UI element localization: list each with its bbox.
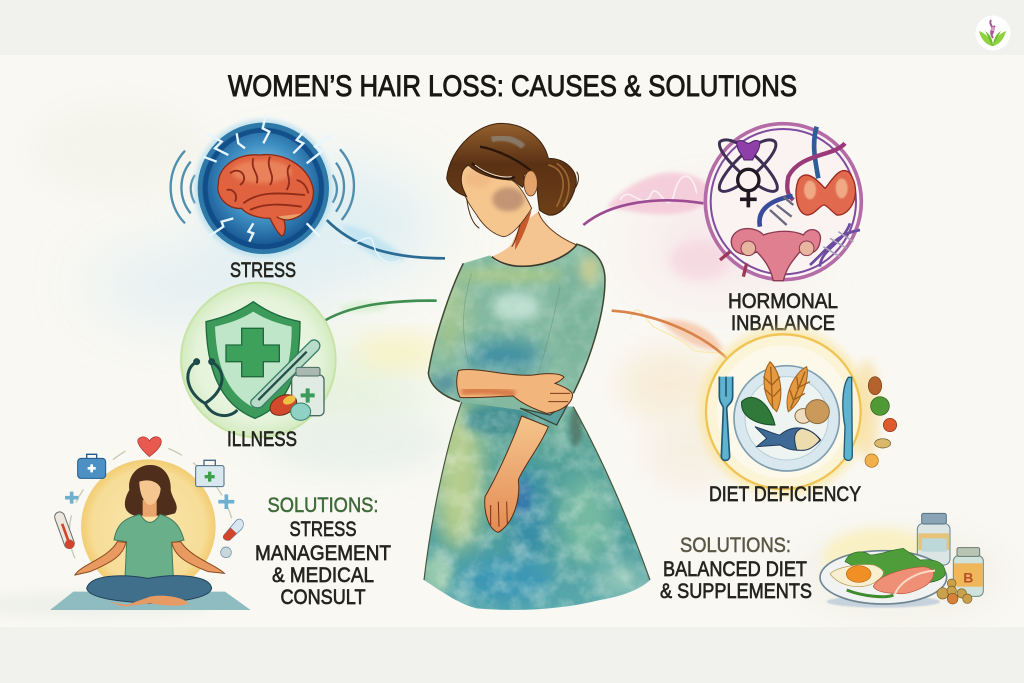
solution: meditation illustration: [50, 437, 251, 610]
solutions label: diet and supplements: & SUPPLEMENTS: [660, 580, 812, 603]
stress label: STRESS: [230, 259, 296, 282]
atom and female symbol: [719, 140, 777, 207]
hormonal circle: [705, 124, 861, 280]
figure neck and chest: [492, 210, 577, 266]
solutions label: stress and medical: SOLUTIONS:: [268, 494, 378, 517]
side nutrients: [865, 377, 897, 467]
meditating woman: [75, 465, 224, 607]
vitamin B bottle: B: [963, 569, 973, 585]
stress lightning bolts: [203, 115, 332, 242]
plate: [734, 366, 839, 471]
solutions label: diet and supplements: [660, 534, 812, 603]
diet connector: [612, 310, 738, 372]
illness circle: [181, 283, 336, 437]
figure hanging arm and hand: [485, 416, 548, 532]
illness stethoscope: [188, 360, 237, 416]
stress brain: [218, 155, 313, 236]
meal glow: [823, 528, 937, 585]
plus signs: [65, 492, 234, 509]
tall supplement bottle: [917, 513, 950, 565]
cause: stress icon: [171, 115, 445, 263]
solution: balanced meal and supplements: [820, 513, 983, 608]
figure hair and bun: [447, 123, 578, 228]
solutions label: stress and medical: CONSULT: [280, 586, 366, 609]
green first aid kit: [196, 460, 224, 487]
solutions label: stress and medical: & MEDICAL: [272, 564, 374, 587]
vitamin B bottle: [953, 548, 983, 596]
uterus: [731, 229, 821, 281]
figure skirt: [423, 402, 650, 610]
solutions label: diet and supplements: BALANCED DIET: [663, 558, 807, 581]
figure faceless head: [461, 165, 532, 237]
figure bodice and sleeves: [427, 243, 607, 427]
fork: [719, 377, 733, 460]
solutions label: stress and medical: STRESS: [290, 518, 356, 541]
knife: [843, 377, 852, 460]
diet deficiency label: DIET DEFICIENCY: [709, 483, 861, 506]
illness medicine bottle: [292, 367, 324, 416]
yoga mat: [50, 592, 251, 610]
illness pills: [267, 391, 311, 420]
nuts and capsules: [937, 579, 972, 604]
potatoes: [795, 400, 829, 424]
figure forearm and hand across waist: [457, 370, 573, 413]
wheat stalks: [763, 362, 810, 412]
cause: diet deficiency icon: [612, 310, 897, 495]
fish: [755, 427, 821, 450]
meditation sun: [82, 460, 215, 593]
stress sound arcs: [171, 149, 354, 223]
illness thermometer: [251, 340, 320, 408]
solutions label: stress and medical: MANAGEMENT: [255, 542, 391, 565]
illness shield: [206, 302, 300, 418]
capsule and tablet: [221, 519, 243, 558]
illness connector: [313, 301, 437, 328]
solutions label: diet and supplements: SOLUTIONS:: [680, 534, 791, 557]
blue first aid kit: [78, 454, 106, 478]
stress connector: [327, 220, 445, 263]
cause: hormonal imbalance icon: [583, 124, 861, 281]
stress circle: [194, 119, 333, 258]
orbit strokes: [69, 448, 232, 558]
hormonal imbalance label: HORMONAL: [728, 290, 838, 313]
thermometer: [53, 511, 76, 550]
hormonal imbalance label: [728, 290, 838, 335]
title: WOMEN’S HAIR LOSS: CAUSES & SOLUTIONS: [228, 70, 797, 103]
thyroid gland: [796, 171, 856, 215]
dna strands: [720, 127, 860, 277]
hormonal wash: [670, 240, 730, 280]
plate of food: [820, 548, 947, 608]
heart icon: [138, 437, 161, 457]
hormonal connector: [583, 172, 710, 225]
solutions label: stress and medical: [255, 494, 391, 609]
cause: illness icon: [181, 283, 437, 437]
spinach leaf: [742, 397, 775, 425]
illness label: ILLNESS: [227, 428, 297, 451]
diet glow and ring: [700, 328, 880, 495]
logo badge: [976, 16, 1010, 50]
central figure: woman with bowed head: [413, 123, 663, 620]
figure ear: [524, 171, 537, 196]
hormonal imbalance label: INBALANCE: [731, 312, 835, 335]
